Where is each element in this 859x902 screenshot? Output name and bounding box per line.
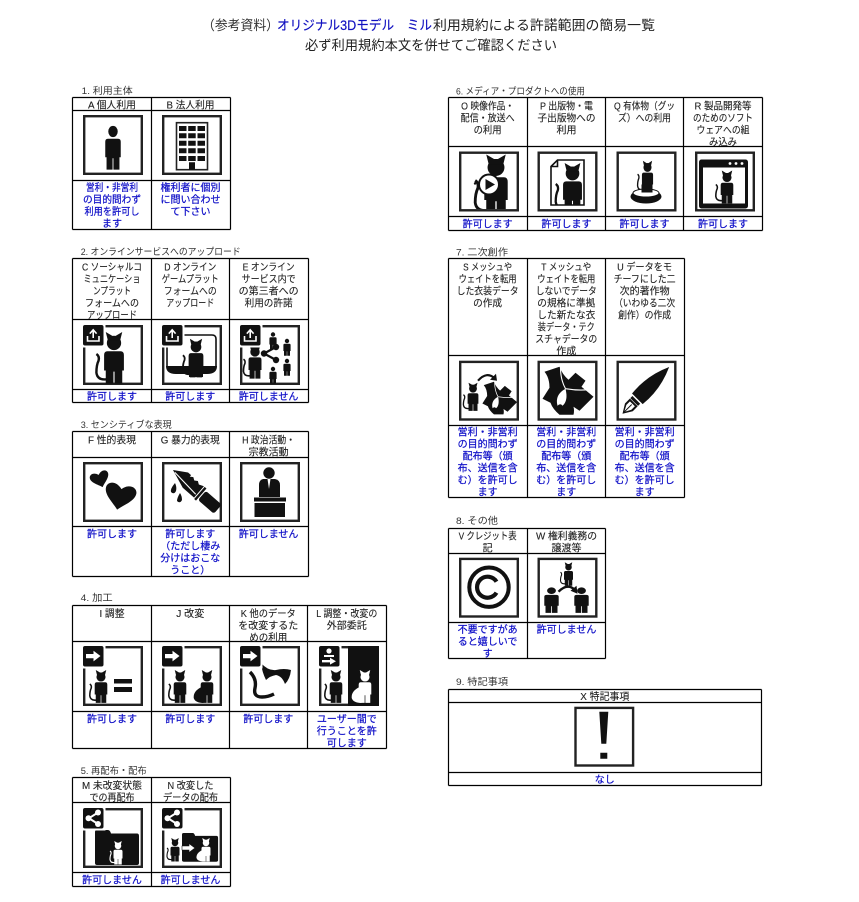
header: U: チーフにした二 — [614, 273, 676, 285]
status: K: 許可します — [243, 712, 293, 726]
status: O: 許可します — [463, 218, 513, 230]
status: G — [160, 528, 220, 577]
header: S: の作成 — [473, 297, 502, 309]
status: A: 利用を許可し — [84, 205, 140, 218]
header: N — [163, 779, 218, 804]
status: T: 配布等（頒 — [541, 450, 591, 462]
table grid: 9 — [448, 690, 762, 786]
panel: 8. その他 — [448, 515, 606, 660]
header: C: アップロード — [87, 309, 137, 321]
header: O: 配信・放送へ — [461, 112, 515, 124]
icon: redistribute unmodified — [82, 807, 142, 867]
heading: 3: 3. センシティブな表現 — [81, 419, 172, 431]
header: S — [457, 261, 519, 309]
header: P: 子出版物への — [538, 112, 596, 124]
header: B 法人利用: B 法人利用 — [166, 100, 214, 112]
icon: modify — [161, 645, 221, 705]
icon: transfer of rights — [539, 559, 596, 616]
header: K: めの利用 — [249, 632, 287, 644]
header: D: D オンライン — [164, 261, 216, 273]
icon: building — [163, 116, 221, 174]
status: G: 許可します — [165, 528, 215, 541]
header: D: アップロード — [166, 297, 214, 309]
status: F: 許可します — [87, 528, 137, 541]
status: L: ユーザー間で — [317, 714, 377, 726]
header: U: （いわゆる二次 — [614, 296, 675, 309]
header: K — [238, 607, 298, 644]
header: L: L 調整・改変の — [316, 607, 377, 620]
panel: 7. 二次創作 — [448, 246, 684, 498]
header: C: フォームへの — [85, 297, 139, 309]
status: B — [160, 181, 220, 218]
status: U: 配布等（頒 — [620, 450, 670, 462]
title: 必ず利用規約本文を併せてご確認ください — [305, 38, 557, 53]
status: T: む）を許可し — [536, 474, 596, 486]
status: S: 配布等（頒 — [463, 450, 513, 462]
status: Q: 許可します — [620, 218, 670, 230]
header: S: S メッシュや — [463, 261, 512, 273]
icon: knife with blood drops — [163, 463, 223, 521]
header: T: 装データ・テク — [538, 320, 595, 333]
table grid: 8 — [448, 528, 606, 658]
header: D — [162, 261, 219, 309]
panel: 9. 特記事項 — [448, 676, 762, 786]
header: T: しないでデータ — [536, 284, 597, 297]
status: E: 許可しません — [239, 390, 298, 403]
status: S: 営利・非営利 — [458, 426, 518, 438]
header: T: 作成 — [556, 345, 576, 357]
header: N: N 改変した — [168, 779, 214, 792]
table grid: 6 — [448, 98, 762, 230]
header: X: X 特記事項 — [580, 690, 629, 703]
status: W: 許可しません — [537, 623, 596, 636]
icon: speaker at podium — [241, 463, 299, 521]
header: E: E オンライン — [243, 261, 295, 273]
panel: 1. 利用主体 — [72, 85, 230, 230]
status: V: ると嬉しいで — [458, 635, 517, 648]
header: F: F 性的表現 — [88, 434, 136, 446]
status: S: の目的問わず — [458, 438, 518, 450]
icon: publication — [539, 153, 596, 212]
status: V — [458, 623, 518, 660]
header: V: 記 — [483, 542, 493, 554]
header: W — [536, 530, 597, 554]
table grid: 4 — [72, 606, 386, 748]
status: P: 許可します — [542, 218, 592, 230]
status: J: 許可します — [165, 712, 215, 726]
header: E: サービス内で — [242, 272, 296, 285]
heading: 4: 4. 加工 — [81, 593, 113, 604]
table grid: 5 — [72, 778, 230, 886]
header: K: を改変するた — [238, 619, 298, 632]
heading: 8: 8. その他 — [456, 515, 499, 527]
icon: cat sharing to third parties — [239, 324, 299, 384]
status: X: なし — [595, 774, 615, 786]
icon: distribute modified — [161, 807, 221, 867]
header: D: ゲームプラット — [162, 273, 219, 285]
header: R: R 製品開発等 — [694, 100, 752, 112]
icon: clothing — [539, 362, 596, 420]
header: D: フォームへの — [164, 285, 217, 297]
heading: 2: 2. オンラインサービスへのアップロード — [81, 247, 241, 258]
header: T: T メッシュや — [541, 261, 591, 273]
status: R: 許可します — [698, 218, 748, 230]
status: I: 許可します — [87, 712, 137, 726]
header: I: I 調整 — [100, 607, 124, 620]
status: V: 不要ですがあ — [458, 623, 518, 636]
icon: goods — [618, 153, 675, 210]
header: U: U データをモ — [617, 260, 672, 273]
status: G: （ただし棲み — [160, 540, 220, 553]
status: B: 権利者に個別 — [160, 181, 220, 194]
header: T — [535, 261, 597, 357]
header: P: P 出版物・電 — [540, 100, 593, 112]
panel: 2. オンラインサービスへのアップロード — [72, 247, 308, 403]
header: M — [82, 779, 142, 804]
header: R — [693, 100, 753, 148]
header: H: H 政治活動・ — [242, 434, 295, 446]
icon: fountain pen — [617, 361, 675, 420]
header: C — [82, 262, 142, 321]
status: S: む）を許可し — [458, 474, 518, 486]
header: M: での再配布 — [90, 792, 134, 804]
status: N: 許可しません — [161, 874, 220, 886]
header: A 個人利用: A 個人利用 — [88, 98, 136, 112]
icon: hearts — [84, 463, 142, 521]
header: V — [459, 530, 517, 554]
panel: 4. 加工 — [72, 593, 386, 750]
header: T: スチャデータの — [535, 332, 597, 345]
table grid: 3 — [72, 432, 308, 576]
header: E: 利用の許諾 — [245, 296, 293, 309]
panel: 3. センシティブな表現 — [72, 419, 308, 577]
icon: copyright — [460, 559, 518, 616]
header: K: K 他のデータ — [241, 607, 296, 620]
status: L — [317, 714, 377, 750]
header: O: の利用 — [474, 124, 502, 136]
icon: cat on monitor with upload badge — [161, 324, 221, 384]
header: C: C ソーシャルコ — [82, 262, 142, 273]
title: 利用規約による許諾範囲の簡易一覧 — [433, 18, 655, 33]
status: A: ます — [102, 218, 122, 230]
status: A: 営利・非営利 — [86, 181, 138, 194]
status: T: ます — [556, 486, 576, 498]
header: S: ウェイトを転用 — [459, 273, 517, 285]
status: B: て下さい — [170, 206, 210, 218]
icon: person — [84, 116, 142, 174]
heading: 6: 6. メディア・プロダクトへの使用 — [456, 86, 585, 98]
title: （参考資料） — [202, 18, 279, 33]
title: オリジナル3Dモデル ミル — [277, 17, 432, 33]
status: S: ます — [478, 486, 498, 498]
status: S — [458, 426, 518, 498]
status: A — [83, 181, 141, 230]
header: O: O 映像作品・ — [461, 100, 514, 112]
status: B: に問い合わせ — [160, 193, 220, 206]
status: A: の目的問わず — [83, 193, 141, 206]
header: R: み込み — [709, 136, 737, 148]
header: P — [538, 100, 596, 136]
header: T: した新たな衣 — [537, 309, 595, 321]
header: W: 譲渡等 — [552, 542, 582, 554]
heading: 1: 1. 利用主体 — [82, 85, 133, 97]
header: T: の規格に準拠 — [537, 296, 595, 309]
status: C: 許可します — [87, 390, 137, 403]
status: U: む）を許可し — [615, 474, 675, 486]
icon: cat to clothing — [460, 362, 518, 420]
table grid: 2 — [72, 258, 308, 402]
header: Q: ズ）への利用 — [618, 112, 671, 124]
header: S: した衣装データ — [457, 284, 519, 297]
header: U: 創作）の作成 — [618, 309, 671, 321]
heading: 7: 7. 二次創作 — [456, 246, 509, 258]
status: T: 営利・非営利 — [536, 426, 596, 438]
header: H — [242, 434, 295, 458]
header: L: 外部委託 — [327, 619, 367, 632]
header: V: V クレジット表 — [459, 530, 517, 542]
header: R: ウェアへの組 — [696, 124, 750, 136]
header: J: J 改変 — [176, 607, 204, 620]
status: U: ます — [635, 486, 655, 498]
status: U: 営利・非営利 — [615, 426, 675, 438]
status: T: の目的問わず — [536, 438, 596, 450]
icon: video — [460, 153, 518, 216]
panel: 6. メディア・プロダクトへの使用 — [448, 86, 762, 230]
header: L — [316, 607, 377, 632]
icon: adjust — [82, 645, 142, 705]
status: D: 許可します — [165, 390, 215, 403]
header: Q — [614, 100, 675, 124]
header: U — [614, 260, 676, 321]
status: U — [615, 426, 675, 498]
header: Q: Q 有体物（グッ — [614, 100, 675, 112]
header: R: のためのソフト — [693, 112, 753, 124]
status: U: 布、送信を含 — [615, 462, 675, 474]
status: L: 可します — [327, 738, 367, 750]
heading: 9: 9. 特記事項 — [456, 676, 509, 688]
heading: 5: 5. 再配布・配布 — [81, 765, 147, 777]
icon: use for other data — [239, 645, 299, 705]
status: U: の目的問わず — [615, 438, 675, 450]
header: P: 利用 — [556, 124, 576, 136]
status: G: 分けはおこな — [160, 553, 220, 565]
header: U: 次的著作物 — [620, 284, 670, 297]
header: E: の第三者への — [239, 284, 299, 297]
header: W: W 権利義務の — [536, 530, 597, 542]
table grid: 1 — [72, 98, 230, 230]
icon: outsourcing — [318, 645, 379, 706]
status: V: す — [483, 648, 493, 660]
header: M: M 未改変状態 — [82, 779, 142, 792]
status: G: うこと） — [170, 565, 210, 577]
status: H: 許可しません — [239, 528, 298, 541]
panel: 5. 再配布・配布 — [72, 765, 230, 886]
header: C: ミュニケーショ — [84, 273, 140, 285]
icon: cat with upload badge — [82, 324, 142, 384]
header: C: ンプラット — [93, 285, 131, 297]
header: E — [239, 261, 299, 309]
header: T: ウェイトを転用 — [537, 273, 595, 285]
header: G: G 暴力的表現 — [161, 434, 220, 446]
status: S: 布、送信を含 — [458, 462, 518, 474]
table grid: 7 — [448, 258, 684, 498]
header: H: 宗教活動 — [249, 446, 289, 458]
status: T: 布、送信を含 — [536, 462, 596, 474]
icon: exclamation mark — [576, 708, 633, 766]
header: O — [461, 100, 515, 136]
status: L: 行うことを許 — [317, 724, 377, 738]
icon: software — [696, 153, 754, 210]
status: M: 許可しません — [82, 874, 142, 886]
header: N: データの配布 — [163, 791, 218, 804]
status: T — [536, 426, 596, 498]
title — [202, 17, 655, 53]
